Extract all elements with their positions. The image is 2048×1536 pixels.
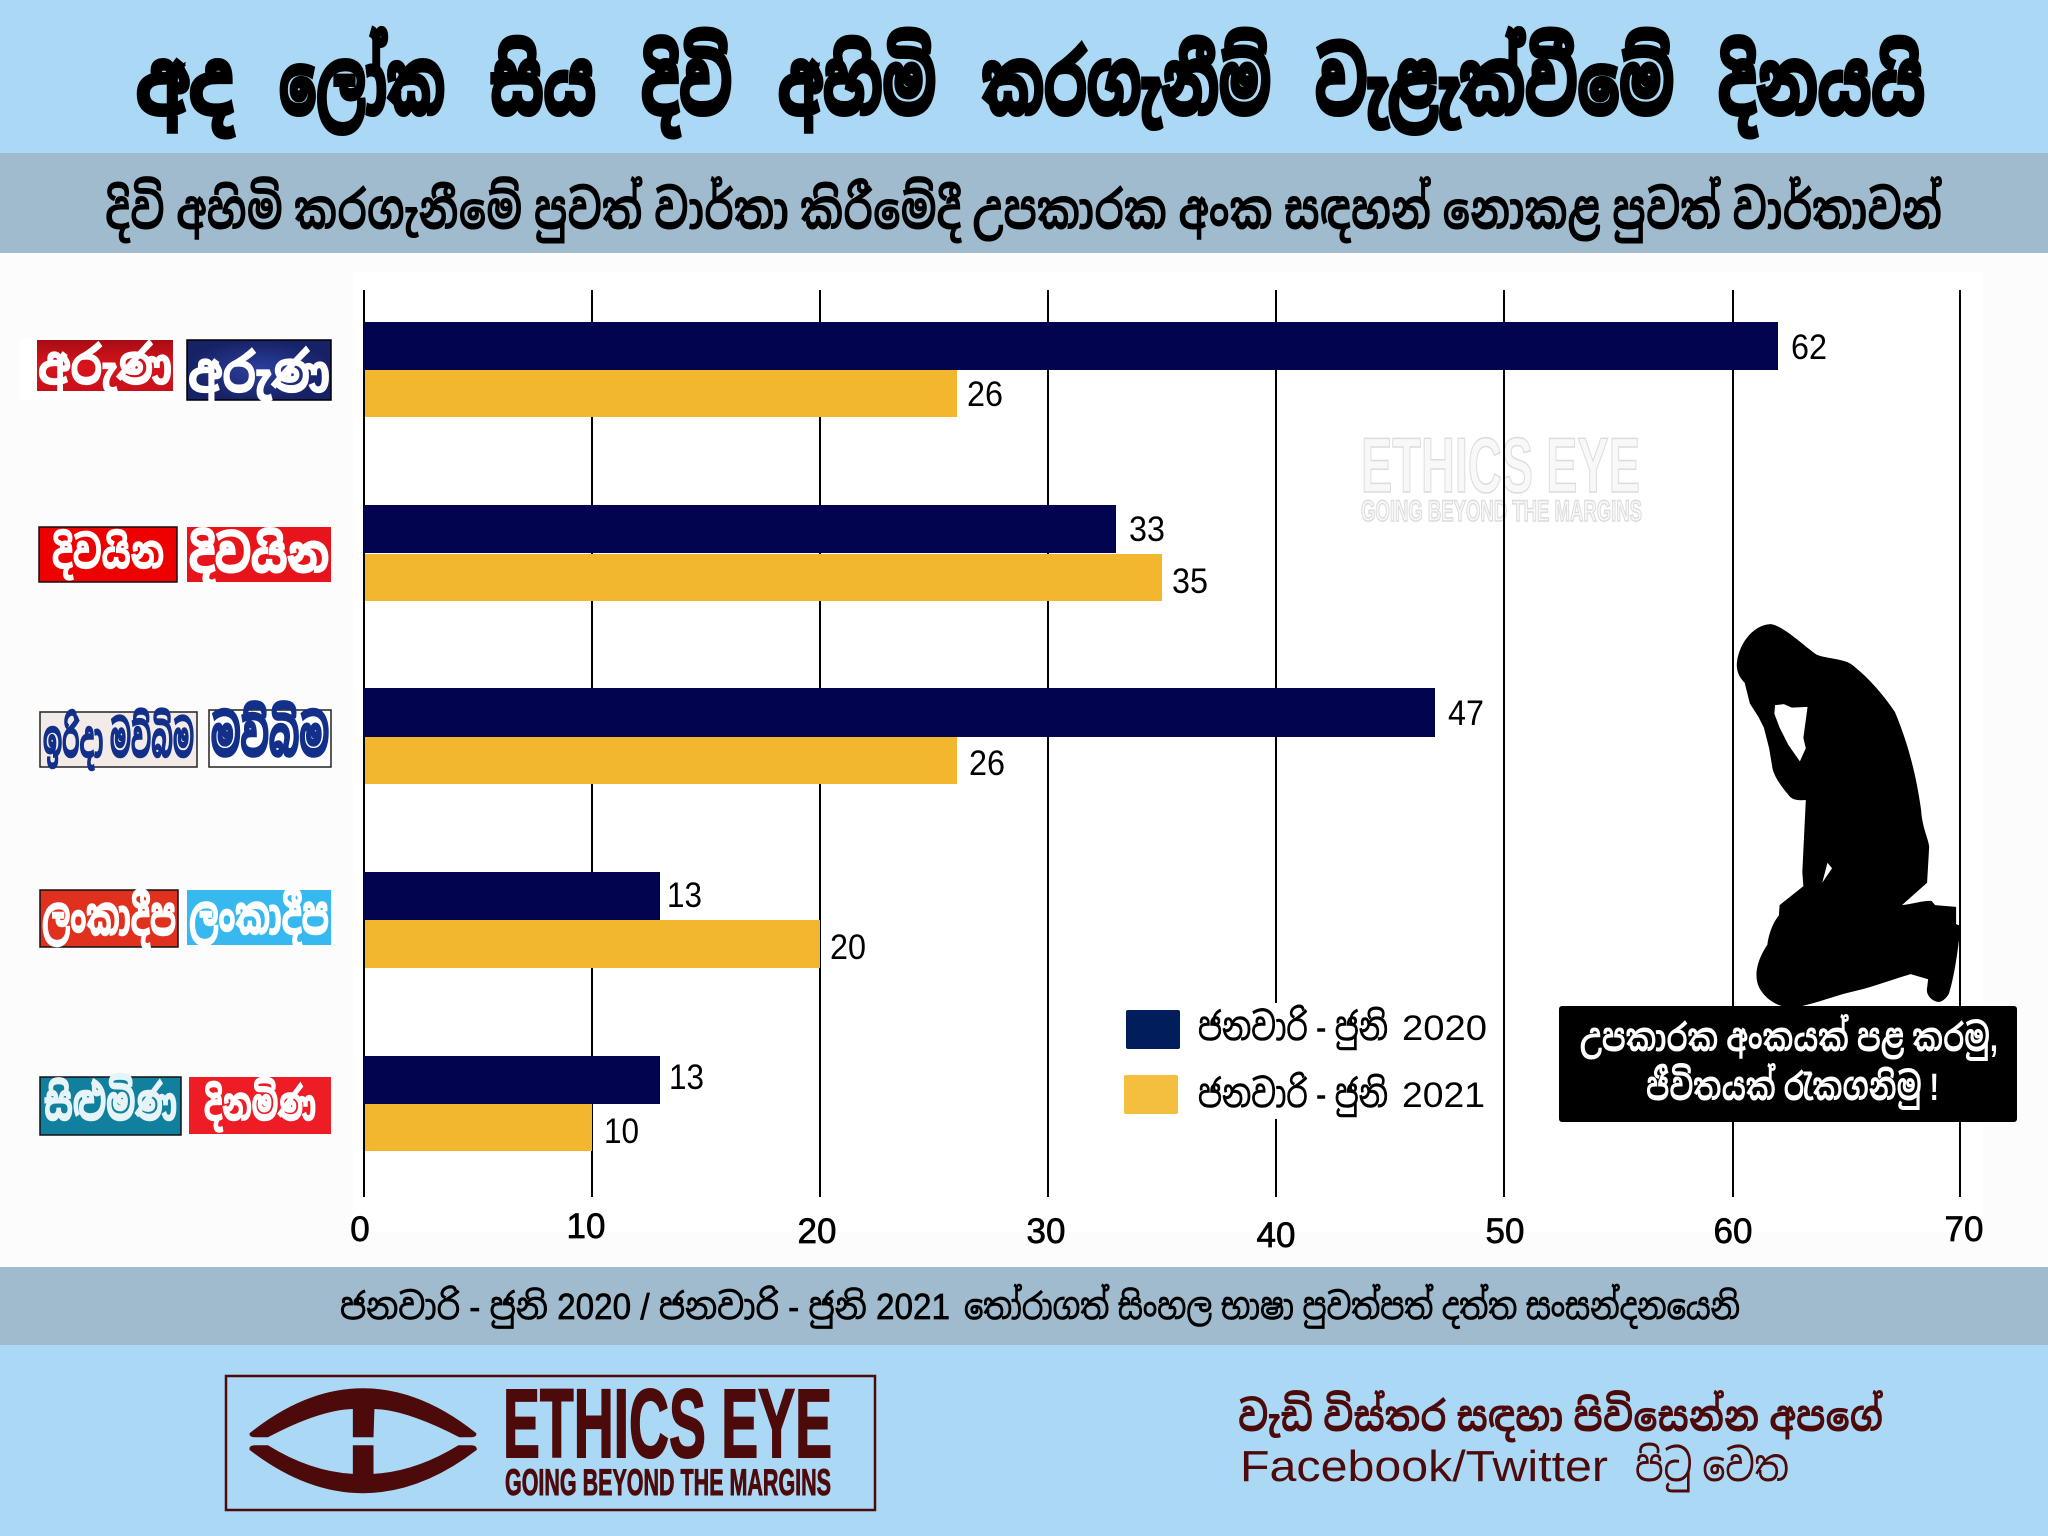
bars: row 2 (364, 505, 1208, 601)
logos: Mawbima: ඉරිදා මව්බිම (43, 709, 194, 770)
title: අහිමි (778, 28, 936, 133)
footer contact text (1238, 1389, 1883, 1492)
x axis labels: 30 (1027, 1212, 1065, 1251)
Ethics Eye logo (226, 1369, 875, 1510)
source note: ජනවාරි - ජුනි 2020 / ජනවාරි - ජුනි 2021 (340, 1285, 950, 1328)
title: අද (136, 34, 235, 138)
bars: row 3 (364, 688, 1484, 784)
title: දිවි (641, 28, 732, 138)
bars: row 5: 10 (604, 1112, 639, 1151)
logos: Divaina: දිවයින (52, 528, 164, 580)
source note: තෝරාගත් සිංහල භාෂා පුවත්පත් දත්ත සංසන්දනයෙනි (964, 1283, 1740, 1328)
title: කරගැනීම් (982, 28, 1271, 133)
grid lines (364, 290, 1960, 1197)
title: සිය (490, 34, 596, 133)
source note (340, 1283, 1740, 1328)
logos: Lankadeepa: ලංකාදීප (42, 889, 176, 949)
title (136, 28, 1925, 138)
bars: row 5: 13 (669, 1058, 704, 1097)
footer contact text: පිටු වෙත (1635, 1442, 1789, 1492)
watermark (1361, 421, 1642, 528)
bars: row 1 (364, 322, 1827, 417)
watermark: GOING BEYOND THE MARGINS (1361, 495, 1642, 528)
logos: Silumina and Dinamina: දිනමිණ (204, 1076, 316, 1132)
logos: Silumina and Dinamina: සිළුමිණ (44, 1074, 177, 1131)
callout: ජීවිතයක් රැකගනිමු ! (1646, 1062, 1939, 1110)
bars: row 5 (364, 1056, 704, 1151)
bars: row 1: 26 (967, 375, 1003, 414)
legend swatch 2020 (1126, 1010, 1180, 1049)
bars: row 1: 62 (1791, 328, 1827, 367)
x axis labels: 20 (798, 1212, 836, 1251)
logos: Aruna: අරුණ (188, 344, 330, 404)
bars: row 2: 33 (1129, 510, 1165, 549)
watermark: ETHICS EYE (1361, 421, 1640, 509)
footer band (0, 1345, 2048, 1536)
x axis labels: 70 (1945, 1210, 1983, 1249)
title: වැළැක්වීමේ (1315, 28, 1674, 135)
logo tagline: GOING BEYOND THE MARGINS (505, 1462, 831, 1503)
title: දිනයයි (1718, 34, 1925, 138)
legend swatch 2021 (1124, 1075, 1178, 1114)
title: ලෝක (279, 28, 445, 134)
title band (0, 0, 2048, 153)
x axis labels: 60 (1714, 1212, 1752, 1251)
bar chart (350, 290, 1983, 1255)
footer contact text: Facebook/Twitter (1240, 1442, 1608, 1491)
x axis labels: 50 (1486, 1212, 1524, 1251)
bars: row 4: 13 (667, 876, 702, 915)
logos: Lankadeepa: ලංකාදීප (189, 888, 329, 948)
bars: row 3: 47 (1448, 694, 1484, 733)
legend (1112, 1003, 1492, 1119)
x axis labels: 10 (567, 1207, 605, 1246)
subtitle band (0, 153, 2048, 253)
icon: eye (249, 1388, 477, 1493)
legend label 2021: ජනවාරි - ජුනි (1198, 1071, 1388, 1117)
logos: Aruna: අරුණ (38, 338, 172, 396)
logos: Mawbima: මව්බිම (211, 702, 329, 768)
logos: Silumina and Dinamina (40, 1074, 331, 1135)
icon: kneeling person silhouette (1737, 624, 1961, 1008)
x axis labels: 0 (350, 1210, 370, 1249)
callout (1559, 1006, 2017, 1122)
legend label 2021: 2021 (1402, 1076, 1485, 1115)
logo wordmark: ETHICS EYE (503, 1369, 832, 1478)
bars: row 3: 26 (969, 744, 1005, 783)
x axis labels: 40 (1257, 1216, 1295, 1255)
bars: row 2: 35 (1172, 562, 1208, 601)
logos: Aruna (20, 338, 331, 404)
bars: row 4 (364, 872, 866, 968)
bars: row 4: 20 (830, 928, 866, 967)
footer contact text: වැඩි විස්තර සඳහා පිවිසෙන්න අපගේ (1238, 1389, 1883, 1442)
legend label 2020: 2020 (1402, 1009, 1487, 1048)
legend label 2020: ජනවාරි - ජුනි (1198, 1004, 1388, 1050)
logos: Divaina: දිවයින (189, 527, 329, 585)
source band (0, 1267, 2048, 1345)
x axis labels (350, 1207, 1983, 1255)
logos: Divaina (39, 527, 331, 585)
